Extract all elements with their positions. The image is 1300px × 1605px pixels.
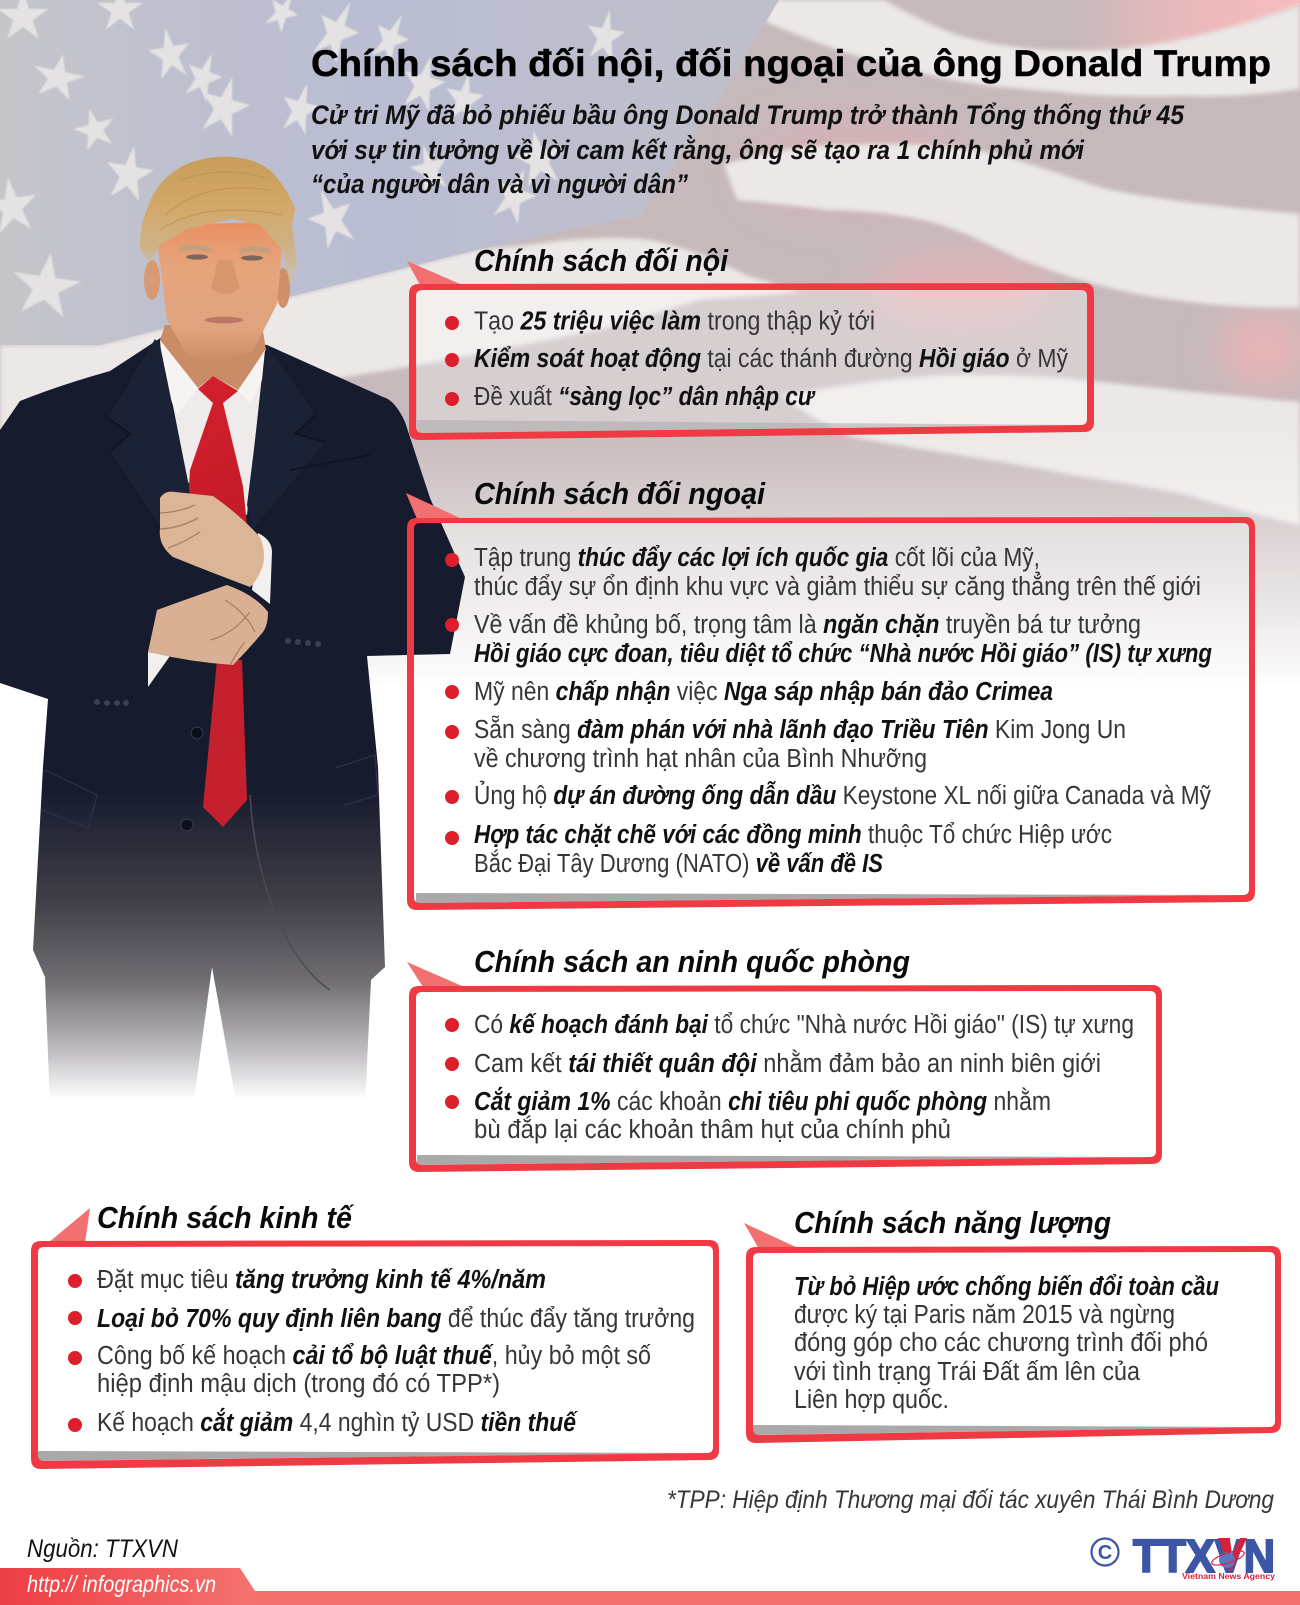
paragraph: với tình trạng Trái Đất ấm lên của [794, 1358, 1141, 1386]
list: Đề xuất “sàng lọc” dân nhập cư [474, 383, 816, 411]
red frame [31, 1240, 719, 1469]
jacket buttons [181, 727, 203, 831]
heading: Chính sách an ninh quốc phòng [474, 944, 910, 979]
list: Công bố kế hoạch cải tổ bộ luật thuế, hủy bỏ một số [97, 1342, 651, 1370]
list: Kiểm soát hoạt động tại các thánh đường Hồi giáo ở Mỹ [474, 345, 1068, 373]
intro text [311, 100, 1185, 199]
list: Về vấn đề khủng bố, trọng tâm là ngăn chặn truyền bá tư tưởng [474, 611, 1141, 639]
upper fist fingers [160, 505, 200, 548]
lower tie [203, 660, 247, 827]
logo: TTXVN: C [1098, 1542, 1112, 1564]
red frame [407, 517, 1255, 910]
heading: Chính sách kinh tế [97, 1200, 355, 1235]
panel: foreign policy [406, 476, 1255, 910]
panel: domestic policy [407, 243, 1094, 440]
list: Tạo 25 triệu việc làm trong thập kỷ tới [474, 308, 875, 336]
list: Ủng hộ dự án đường ống dẫn dầu Keystone XL nối giữa Canada và Mỹ [474, 780, 1211, 810]
lapels [108, 339, 325, 529]
collar [160, 340, 265, 415]
list: Hồi giáo cực đoan, tiêu diệt tổ chức “Nhà nước Hồi giáo” (IS) tự xưng [474, 640, 1212, 668]
bullets [445, 1018, 459, 1109]
list: Có kế hoạch đánh bại tổ chức "Nhà nước Hồi giáo" (IS) tự xưng [474, 1011, 1134, 1039]
red frame [409, 985, 1162, 1172]
red V and globe [1210, 1538, 1247, 1572]
list: Mỹ nên chấp nhận việc Nga sáp nhập bán đảo Crimea [474, 678, 1053, 706]
bullets [68, 1274, 82, 1432]
intro text: với sự tin tưởng về lời cam kết rằng, ông sẽ tạo ra 1 chính phủ mới [311, 134, 1084, 165]
list [474, 1011, 1134, 1144]
bottom shadow [38, 1451, 713, 1461]
list: Hợp tác chặt chẽ với các đồng minh thuộc Tổ chức Hiệp ước [474, 821, 1112, 849]
upper fist [160, 492, 264, 587]
callout tail [744, 1223, 798, 1249]
callout tail [407, 261, 460, 285]
footer bar [0, 1568, 1300, 1605]
list [474, 544, 1212, 878]
hair strands [160, 172, 282, 230]
lower fist [148, 585, 268, 665]
stars [0, 0, 629, 319]
heading: Chính sách đối ngoại [474, 476, 766, 511]
list: Bắc Đại Tây Dương (NATO) về vấn đề IS [474, 849, 883, 878]
bottom shadow [753, 1425, 1275, 1435]
list: thúc đẩy sự ổn định khu vực và giảm thiểu sự căng thẳng trên thế giới [474, 571, 1201, 601]
intro text: “của người dân và vì người dân” [311, 169, 688, 199]
list: về chương trình hạt nhân của Bình Nhưỡng [474, 745, 927, 773]
face [157, 222, 282, 363]
canton [0, 0, 779, 345]
ear right [276, 268, 290, 308]
neck [160, 325, 266, 390]
list: Loại bỏ 70% quy định liên bang để thúc đẩy tăng trưởng [97, 1305, 695, 1333]
list: Tập trung thúc đẩy các lợi ích quốc gia cốt lõi của Mỹ, [474, 544, 1040, 572]
lapel seams [108, 415, 370, 470]
list [97, 1266, 695, 1437]
mouth [205, 317, 243, 323]
agency name: Vietnam News Agency [1182, 1571, 1275, 1581]
callout tail [407, 962, 462, 987]
list: hiệp định mậu dịch (trong đó có TPP*) [97, 1370, 500, 1398]
panel: economic policy [31, 1200, 719, 1469]
left cuff [148, 652, 170, 687]
list: Cắt giảm 1% các khoản chi tiêu phi quốc phòng nhằm [474, 1087, 1051, 1116]
pocket flaps [42, 755, 378, 990]
tie knot and upper tie [188, 376, 247, 525]
suit jacket and trousers [0, 335, 465, 1107]
list [474, 308, 1068, 411]
paragraph: được ký tại Paris năm 2015 và ngừng [794, 1301, 1175, 1329]
website link: http:// infographics.vn [27, 1571, 216, 1597]
red frame [409, 283, 1094, 440]
background: faded American flag [0, 0, 1300, 700]
panel: defence and security policy [407, 944, 1162, 1172]
heading: Chính sách năng lượng [794, 1205, 1111, 1240]
paragraph [794, 1273, 1219, 1414]
shirt [160, 340, 265, 515]
bottom shadow [416, 893, 1248, 903]
panel fill [417, 992, 1155, 1164]
ear left [144, 260, 160, 300]
bullets [445, 553, 459, 845]
wordmark: TTXVN [1133, 1530, 1275, 1582]
intro text: Cử tri Mỹ đã bỏ phiếu bầu ông Donald Trump trở thành Tổng thống thứ 45 [311, 100, 1185, 130]
sleeve buttons [94, 638, 321, 706]
hair [140, 157, 297, 284]
bottom shadow [417, 420, 1087, 433]
logo: TTXVN [1092, 1530, 1275, 1582]
heading: Chính sách đối nội [474, 243, 729, 278]
bottom shadow [417, 1155, 1156, 1165]
panel fill: foreign policy (behind figure) [412, 520, 1252, 904]
lower fist fingers [210, 600, 255, 665]
right cuff [252, 533, 272, 604]
panel tint [417, 290, 1087, 433]
source: Nguồn: TTXVN [27, 1535, 179, 1563]
list: Kế hoạch cắt giảm 4,4 nghìn tỷ USD tiền thuế [97, 1408, 579, 1437]
callout tail [48, 1208, 90, 1243]
paragraph: đóng góp cho các chương trình đối phó [794, 1329, 1208, 1357]
list: Sẵn sàng đàm phán với nhà lãnh đạo Triều Tiên Kim Jong Un [474, 715, 1126, 744]
eyes and brows [178, 245, 272, 261]
illustration: Donald Trump portrait [0, 157, 465, 1107]
paragraph: Liên hợp quốc. [794, 1386, 949, 1414]
list: Cam kết tái thiết quân đội nhằm đảm bảo an ninh biên giới [474, 1049, 1101, 1078]
callout tail [406, 493, 460, 519]
paragraph: Từ bỏ Hiệp ước chống biến đổi toàn cầu [794, 1273, 1219, 1301]
title: Chính sách đối nội, đối ngoại của ông Donald Trump [311, 43, 1271, 84]
nose [211, 260, 240, 294]
copyright symbol [1092, 1538, 1118, 1566]
panel: energy policy [744, 1205, 1281, 1443]
list: bù đắp lại các khoản thâm hụt của chính phủ [474, 1115, 951, 1144]
list: Đặt mục tiêu tăng trưởng kinh tế 4%/năm [97, 1266, 546, 1294]
red frame [746, 1246, 1281, 1443]
bullets [445, 316, 459, 406]
